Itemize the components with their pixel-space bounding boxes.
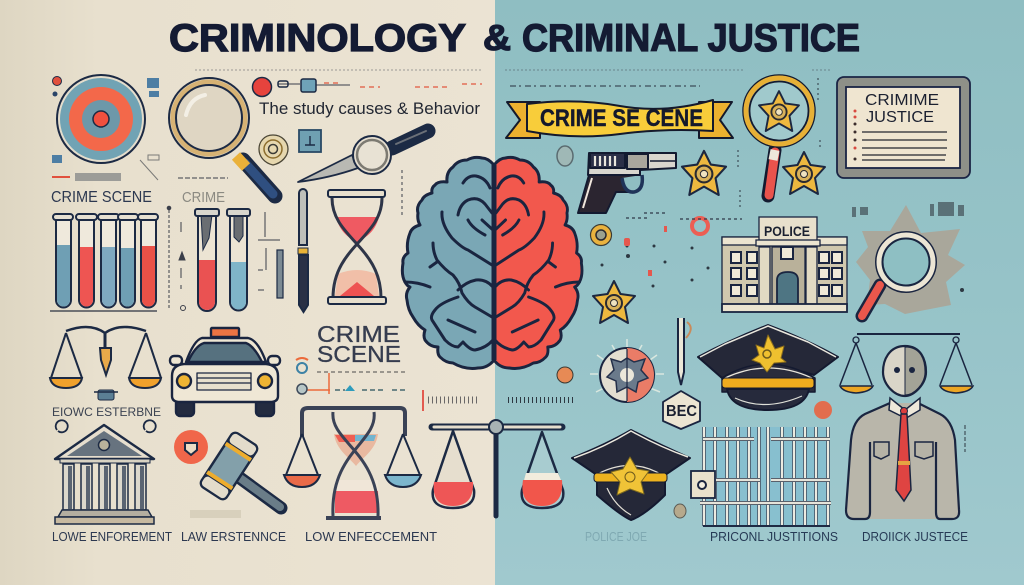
icon: magnifier with star	[743, 75, 815, 196]
icon: gray badge with magnifier	[856, 205, 965, 316]
icon: BEC hexagon: BEC	[666, 403, 697, 420]
caption: police joe: POLICE JOE	[585, 529, 647, 544]
decorative right marks and small icons	[508, 78, 965, 518]
label: crime scene large: SCENE	[317, 341, 401, 367]
icon: temple courthouse	[55, 420, 156, 524]
icon: target	[52, 75, 159, 181]
icon: big balance scale	[432, 420, 563, 516]
test tubes group: five tubes	[50, 214, 158, 311]
label: scale caption: EIOWC ESTERBNE	[52, 407, 161, 419]
title: &	[483, 17, 511, 58]
panel: crime justice document: CRIMIME	[865, 92, 939, 109]
banner: crime scene ribbon	[506, 100, 733, 138]
subtitle text: The study causes & Behavior	[259, 99, 480, 118]
caption: droiick justece: DROIICK JUSTECE	[862, 529, 968, 544]
label: crime scene: CRIME SCENE	[51, 189, 152, 206]
icon: hourglass	[328, 190, 386, 304]
icon: hourglass scale	[284, 408, 421, 518]
label: crime scene large	[317, 321, 401, 367]
icon: large magnifying glass	[169, 78, 275, 196]
icon: pistol	[578, 153, 676, 213]
title: CRIMINAL JUSTICE	[522, 17, 860, 60]
background: left panel	[0, 0, 495, 585]
icon: pen tool	[678, 318, 691, 385]
caption: lowe enforement: LOWE ENFOREMENT	[52, 529, 172, 544]
label: crime faint: CRIME	[182, 189, 225, 206]
mini timeline	[296, 358, 480, 411]
icon: sheriff star three	[593, 281, 635, 323]
icon: compass	[590, 339, 664, 402]
icon: BEC hexagon	[663, 391, 700, 429]
icon: blue square	[299, 130, 321, 152]
icon: police car	[170, 328, 280, 416]
icon: gavel with seal	[174, 430, 281, 518]
title: CRIMINOLOGY	[169, 17, 466, 60]
test tubes group: two tubes	[195, 209, 250, 311]
icon: fingerprint seal	[259, 135, 288, 165]
icon: police hat with shield	[572, 430, 690, 520]
icon: sheriff star one	[682, 151, 726, 195]
left hemisphere	[402, 157, 494, 368]
caption: priconl justitions: PRICONL JUSTITIONS	[710, 529, 838, 544]
icon: person with tie and scale	[840, 334, 973, 519]
caption: low enfeccement: LOW ENFECCEMENT	[305, 529, 437, 544]
icon: thin tool	[277, 189, 308, 312]
panel: crime justice document: JUSTICE	[866, 109, 934, 126]
decorative vertical scale marks	[167, 170, 402, 310]
caption: law erstennce: LAW ERSTENNCE	[181, 529, 286, 544]
top dotted rules and mini timeline marks	[195, 70, 832, 87]
right hemisphere	[494, 157, 582, 368]
icon: red dot with connector	[252, 78, 316, 96]
icon: balance scale left	[50, 327, 161, 400]
title	[169, 17, 860, 60]
background: right panel	[495, 0, 1024, 585]
icon: small oval tag	[557, 146, 573, 166]
bottom labels left	[52, 529, 437, 544]
icon: split brain	[402, 157, 582, 368]
icon: tool with lens	[298, 131, 428, 182]
icon: police building: POLICE	[764, 223, 810, 239]
panel: crime justice document	[837, 77, 970, 178]
icon: police building	[722, 217, 847, 312]
bottom labels right	[585, 529, 968, 544]
icon: prison bars	[691, 427, 831, 526]
icon: sheriff star two	[783, 152, 825, 194]
icon: police hat large	[698, 325, 838, 410]
banner: crime scene ribbon: CRIME SE CENE	[540, 105, 703, 132]
brain centre line	[492, 165, 496, 360]
label: crime scene large: CRIME	[317, 321, 400, 347]
